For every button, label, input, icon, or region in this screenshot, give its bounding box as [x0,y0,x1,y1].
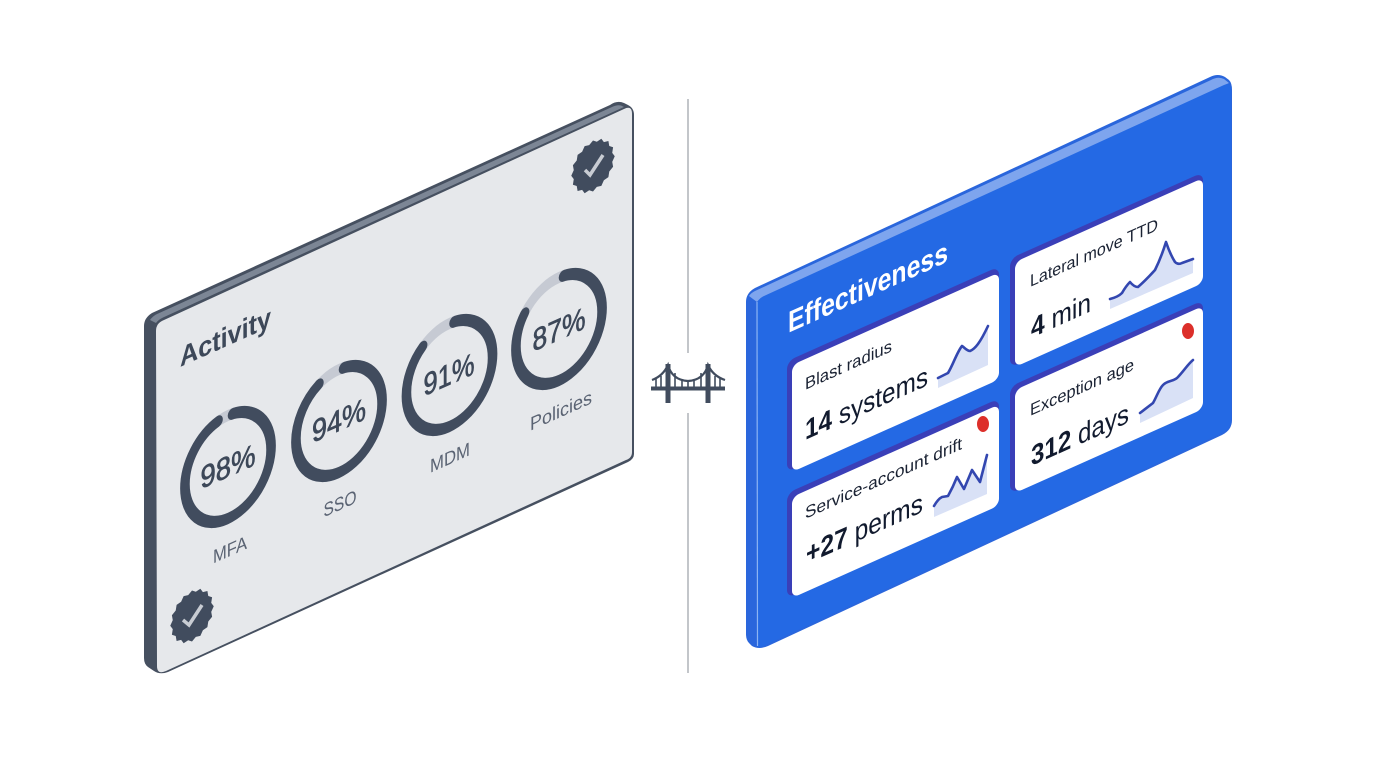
gauge: MFA 98%: 98% [200,437,256,496]
panel slab edge [746,75,1232,648]
panel face [757,84,1231,647]
heading: effectiveness: Effectiveness [788,235,948,340]
gauge: MDM 91%: 91% [424,346,474,403]
card: service-account drift: +27 perms [806,487,923,571]
gauge: MFA 98% [185,396,271,568]
gauge: Policies 87%: 87% [532,301,586,359]
gauge: Policies 87% [516,258,602,436]
gauge: MDM 91% [406,304,493,478]
card: exception age: 312 days [1031,397,1129,473]
card: blast radius: Blast radius [805,336,892,394]
panel face [156,108,632,672]
card: lateral move TTD: Lateral move TTD [1030,214,1158,291]
heading: activity: Activity [180,301,272,374]
card: blast radius [787,266,999,472]
card: service-account drift: Service-account drift [805,434,962,523]
card: lateral move TTD: 4 min [1031,286,1091,345]
gauge: MDM 91%: MDM [430,439,470,478]
alert dot [977,416,989,432]
gauge: MFA 98%: MFA [213,532,248,568]
panel: effectiveness [746,75,1232,648]
panel slab edge [144,102,634,673]
divider line: upper [687,99,689,353]
gauge: SSO 94% [296,350,382,522]
badge: top right [571,131,615,201]
gauge: SSO 94%: 94% [312,391,366,450]
card: lateral move TTD [1010,172,1203,368]
divider line: lower [687,413,689,673]
badge: bottom left [170,581,214,651]
card: exception age: Exception age [1030,354,1134,420]
panel top rim [749,78,1229,302]
panel: activity [144,102,634,673]
icon: bridge [651,364,725,403]
alert dot [1182,323,1194,339]
gauge: SSO 94%: SSO [324,486,356,522]
card: exception age [1010,300,1203,494]
panel top rim [150,105,624,323]
card: blast radius: 14 systems [805,360,928,447]
gauge: Policies 87%: Policies [530,387,592,436]
card: service-account drift [787,398,999,598]
panel side highlight [756,302,758,646]
